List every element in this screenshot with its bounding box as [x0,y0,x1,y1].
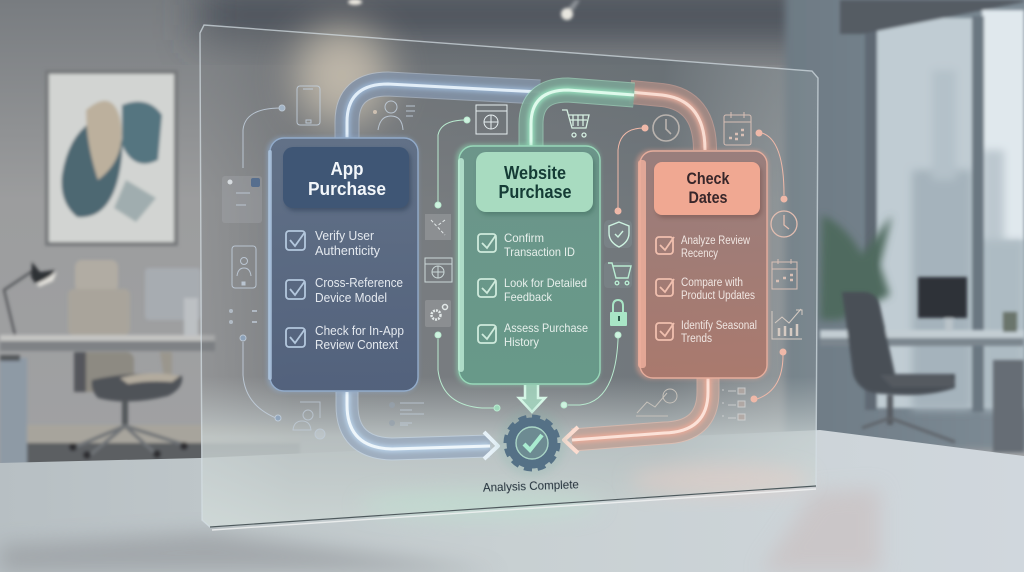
panel: Website Purchase [456,144,600,385]
checklist: Check Dates: Compare with [681,277,743,289]
icon: shield [604,220,632,248]
connector: lower green left [435,332,500,411]
icon: dots grid [229,309,257,324]
icon: trend chart [772,309,802,339]
connector: clock to shield [615,125,648,214]
checklist: Check Dates: Analyze Review [681,235,751,247]
checklist: App Purchase: Cross-Reference [315,276,403,290]
glass panel [200,25,818,530]
checklist: Website Purchase: Confirm [504,231,544,245]
flow pipe: blue top [347,84,540,140]
icon: browser globe top [476,105,507,134]
checklist: Website Purchase: Assess Purchase [504,321,588,335]
label: Analysis Complete: Analysis Complete [483,477,579,495]
checklist: App Purchase: Authenticity [315,244,381,258]
ceiling lights [348,0,580,20]
checklist: Website Purchase: History [504,335,539,349]
icon: calendar [772,259,797,289]
checklist: App Purchase: Review Context [315,338,398,352]
heading: Check Dates: Dates [688,188,728,207]
flow pipe: green top [531,90,634,146]
checklist: Website Purchase [478,231,588,349]
icon: gears [425,300,451,327]
heading: Check Dates: Check [686,169,730,188]
table surface [0,430,1024,572]
checklist: Website Purchase: Feedback [504,290,553,304]
heading: App Purchase: App [330,159,364,179]
icon: user profile [293,402,325,439]
icon: line and pie chart [636,389,677,416]
icon: browser globe [425,258,452,282]
icon: list [389,402,424,426]
icon: profile phone [232,246,256,288]
checklist: Check Dates: Recency [681,248,718,260]
icon: clock [771,211,797,237]
connector: lower right [751,349,786,402]
checklist: Check Dates [656,235,757,345]
lower tints [360,489,600,521]
flow pipe: coral top [630,92,705,150]
heading: App Purchase: Purchase [308,179,386,199]
floor and furniture left [0,260,300,466]
panel: Check Dates [636,150,768,379]
arrow: green down [519,385,545,412]
icon: magic tool [425,214,451,240]
icon: gear with check [498,409,566,477]
icon: lock [610,300,627,326]
icon: cart [604,262,632,288]
furniture right [820,277,1024,452]
checklist: App Purchase: Device Model [315,291,387,305]
left satellite icons: blue [222,86,424,439]
table pink reflection [760,488,880,572]
table shading [0,532,500,572]
heading: Check Dates [654,162,762,218]
icon: mini table [722,388,745,420]
checklist: App Purchase: Verify User [315,229,374,243]
connector: phone to side [243,105,285,168]
panel: App Purchase [267,137,418,392]
connector: lower green right [561,332,621,408]
icon: shopping cart top [562,110,589,137]
checklist: Check Dates: Trends [681,333,712,345]
heading: Website Purchase: Purchase [498,182,572,202]
icon: calendar top [724,112,751,145]
icon: clock top [653,115,679,141]
centre-left satellite icons [425,105,621,411]
checklist: Website Purchase: Transaction ID [504,245,575,259]
connector: calendar to clock [756,130,787,202]
checklist: Website Purchase: Look for Detailed [504,276,587,290]
connector: lower left [240,335,281,421]
connector: globe [435,117,470,208]
checklist: Check Dates: Product Updates [681,290,755,302]
right satellite icons [636,112,802,420]
heading: App Purchase [283,147,411,211]
flow pipe: blue bottom with arrow [347,392,498,459]
icon: phone [297,86,320,125]
wall painting [45,70,178,246]
checklist: App Purchase [286,229,404,352]
flow pipe: coral bottom with arrow [564,378,708,453]
checklist: App Purchase: Check for In-App [315,324,404,338]
window [840,0,1024,412]
icon: user group [373,101,415,130]
heading: Website Purchase: Website [504,163,566,183]
warm reflection [294,25,390,125]
card: small dashboard [222,176,262,223]
checklist: Check Dates: Identify Seasonal [681,320,757,332]
heading: Website Purchase [476,152,595,215]
plant [820,215,892,320]
